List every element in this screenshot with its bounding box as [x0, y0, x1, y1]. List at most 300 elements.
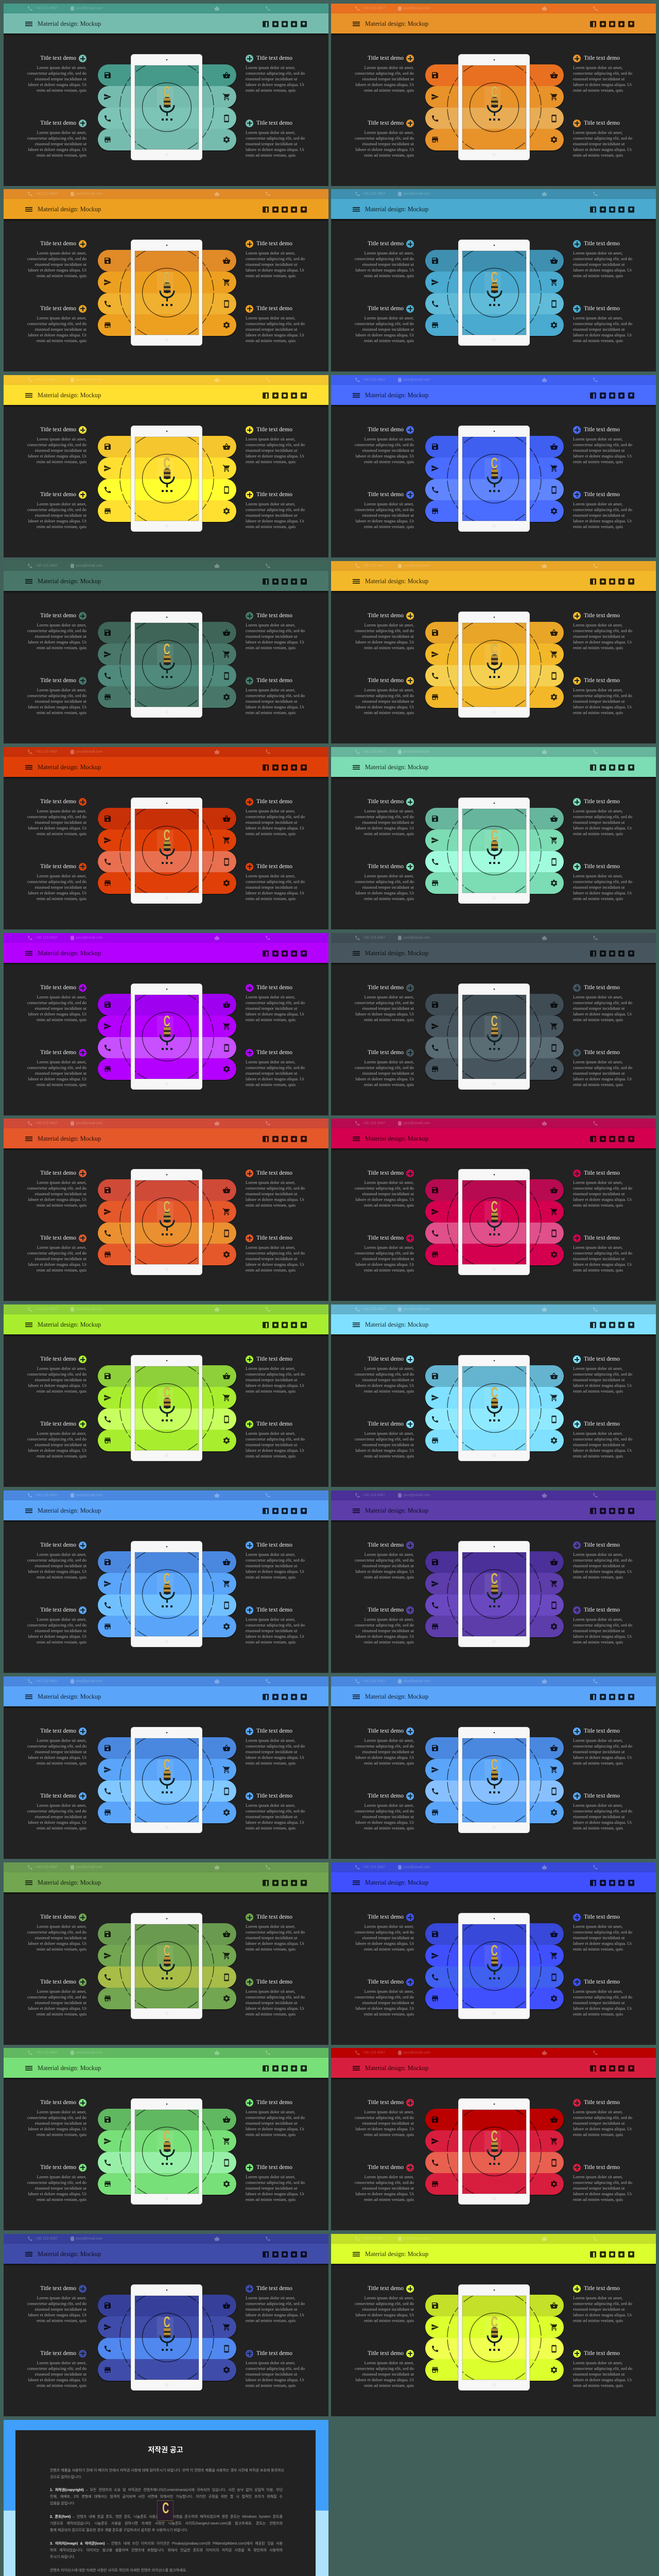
top bar: your@email.com	[76, 378, 103, 382]
top bar: +00 123 4567	[363, 1308, 385, 1311]
text block: Title text demo	[368, 120, 404, 126]
top bar: +00 123 4567	[36, 1680, 58, 1683]
text block	[350, 1541, 414, 1580]
text block	[246, 1355, 310, 1394]
text block: Lorem ipsum dolor sit amet, consectetur adipiscing elit, sed do eiusmod tempor incididunt ut labore et dolore magna aliqua. Ut enim ad minim veniam, quis	[573, 315, 632, 343]
top bar: +00 123 4567	[363, 378, 385, 382]
heading: copyright notice: 저작권 공고	[148, 2446, 183, 2454]
header: Material design: Mockup	[38, 1507, 101, 1514]
text block: Title text demo	[256, 799, 292, 805]
text block: Lorem ipsum dolor sit amet, consectetur adipiscing elit, sed do eiusmod tempor incididunt ut labore et dolore magna aliqua. Ut enim ad minim veniam, quis	[246, 994, 305, 1022]
top bar: your@email.com	[403, 1122, 430, 1125]
text block: Title text demo	[256, 863, 292, 870]
header: Material design: Mockup	[365, 2064, 428, 2072]
tablet mockup with pills	[98, 426, 237, 532]
header	[4, 1500, 328, 1520]
text block: Lorem ipsum dolor sit amet, consectetur adipiscing elit, sed do eiusmod tempor incididunt ut labore et dolore magna aliqua. Ut enim ad minim veniam, quis	[246, 1431, 305, 1459]
text block	[350, 1049, 414, 1088]
header: Material design: Mockup	[38, 392, 101, 399]
top bar: +00 123 4567	[36, 564, 58, 568]
top bar: your@email.com	[76, 2237, 103, 2241]
text block: Title text demo	[368, 492, 404, 498]
text block	[573, 1727, 637, 1766]
watermark	[157, 1387, 174, 1408]
text block: Title text demo	[368, 1421, 404, 1427]
top bar: your@email.com	[403, 2051, 430, 2055]
text block: Lorem ipsum dolor sit amet, consectetur adipiscing elit, sed do eiusmod tempor incididunt ut labore et dolore magna aliqua. Ut enim ad minim veniam, quis	[355, 315, 414, 343]
text block	[350, 984, 414, 1023]
watermark: C	[164, 1570, 170, 1587]
text block: Lorem ipsum dolor sit amet, consectetur adipiscing elit, sed do eiusmod tempor incididunt ut labore et dolore magna aliqua. Ut enim ad minim veniam, quis	[246, 1180, 305, 1208]
text block: Title text demo	[584, 799, 620, 805]
text block: Title text demo	[40, 985, 76, 991]
text block: Title text demo	[368, 1356, 404, 1362]
text block: Title text demo	[368, 2164, 404, 2171]
top bar: your@email.com	[76, 1494, 103, 1497]
text block	[350, 1606, 414, 1645]
watermark: C	[491, 2314, 498, 2331]
tablet mockup with pills	[98, 984, 237, 1090]
top bar: your@email.com	[76, 1866, 103, 1869]
text block	[350, 863, 414, 902]
text block	[246, 1792, 310, 1831]
watermark	[484, 1945, 501, 1966]
text block	[350, 1170, 414, 1208]
text block	[246, 1606, 310, 1645]
panel: card yellow	[4, 375, 328, 557]
header: Material design: Mockup	[365, 392, 428, 399]
text block: Title text demo	[256, 613, 292, 619]
text block: Title text demo	[584, 863, 620, 870]
header: Material design: Mockup	[365, 1507, 428, 1514]
text block: Lorem ipsum dolor sit amet, consectetur adipiscing elit, sed do eiusmod tempor incididunt ut labore et dolore magna aliqua. Ut enim ad minim veniam, quis	[246, 130, 305, 158]
header: Material design: Mockup	[365, 206, 428, 213]
text block: Lorem ipsum dolor sit amet, consectetur adipiscing elit, sed do eiusmod tempor incididunt ut labore et dolore magna aliqua. Ut enim ad minim veniam, quis	[573, 2295, 632, 2323]
text block: Lorem ipsum dolor sit amet, consectetur adipiscing elit, sed do eiusmod tempor incididunt ut labore et dolore magna aliqua. Ut enim ad minim veniam, quis	[27, 622, 86, 650]
panel: card navy	[4, 2234, 328, 2416]
text block: Lorem ipsum dolor sit amet, consectetur adipiscing elit, sed do eiusmod tempor incididunt ut labore et dolore magna aliqua. Ut enim ad minim veniam, quis	[246, 1617, 305, 1645]
text block: Lorem ipsum dolor sit amet, consectetur adipiscing elit, sed do eiusmod tempor incididunt ut labore et dolore magna aliqua. Ut enim ad minim veniam, quis	[27, 1617, 86, 1645]
text block	[573, 1792, 637, 1831]
text block	[246, 2285, 310, 2324]
text block: Title text demo	[40, 1979, 76, 1985]
text block	[22, 1541, 86, 1580]
watermark	[157, 1945, 174, 1966]
panel: copyright notice	[4, 2420, 328, 2576]
text block: Title text demo	[368, 1235, 404, 1241]
watermark	[484, 458, 501, 479]
text block: Title text demo	[40, 2285, 76, 2292]
text block	[22, 1049, 86, 1088]
top bar	[4, 747, 328, 757]
tablet mockup with pills	[425, 984, 564, 1090]
text block	[350, 1978, 414, 2017]
text block: Title text demo	[40, 120, 76, 126]
panel: card purple	[4, 933, 328, 1115]
text block	[350, 798, 414, 837]
text block: Title text demo	[584, 306, 620, 312]
text block: Title text demo	[584, 427, 620, 433]
text block	[573, 1049, 637, 1088]
text block: Lorem ipsum dolor sit amet, consectetur adipiscing elit, sed do eiusmod tempor incididunt ut labore et dolore magna aliqua. Ut enim ad minim veniam, quis	[27, 1180, 86, 1208]
text block: Title text demo	[40, 492, 76, 498]
watermark: C	[164, 2314, 170, 2331]
text block	[22, 863, 86, 902]
header: Material design: Mockup	[38, 2064, 101, 2072]
text block	[22, 1420, 86, 1459]
header: Material design: Mockup	[38, 20, 101, 27]
text block	[573, 863, 637, 902]
top bar: your@email.com	[403, 2237, 430, 2241]
text block: Lorem ipsum dolor sit amet, consectetur adipiscing elit, sed do eiusmod tempor incididunt ut labore et dolore magna aliqua. Ut enim ad minim veniam, quis	[355, 501, 414, 529]
panel: card royal blue	[331, 375, 656, 557]
top bar	[331, 1118, 656, 1128]
text block: Title text demo	[584, 2164, 620, 2171]
text block: Lorem ipsum dolor sit amet, consectetur adipiscing elit, sed do eiusmod tempor incididunt ut labore et dolore magna aliqua. Ut enim ad minim veniam, quis	[355, 873, 414, 901]
top bar	[331, 747, 656, 757]
text block: Lorem ipsum dolor sit amet, consectetur adipiscing elit, sed do eiusmod tempor incididunt ut labore et dolore magna aliqua. Ut enim ad minim veniam, quis	[27, 436, 86, 464]
header: Material design: Mockup	[365, 2250, 428, 2258]
tablet mockup with pills	[98, 54, 237, 160]
top bar: +00 123 4567	[36, 936, 58, 940]
text block: Title text demo	[256, 2099, 292, 2106]
top bar	[331, 2234, 656, 2244]
top bar: your@email.com	[76, 1308, 103, 1311]
top bar	[4, 4, 328, 13]
text block: Title text demo	[256, 2350, 292, 2357]
watermark: C	[164, 83, 170, 100]
tablet mockup with pills	[98, 240, 237, 346]
text block: Lorem ipsum dolor sit amet, consectetur adipiscing elit, sed do eiusmod tempor incididunt ut labore et dolore magna aliqua. Ut enim ad minim veniam, quis	[246, 1924, 305, 1952]
text block: Title text demo	[368, 1914, 404, 1920]
top bar: your@email.com	[403, 1494, 430, 1497]
text block: Title text demo	[40, 1356, 76, 1362]
text block: Lorem ipsum dolor sit amet, consectetur adipiscing elit, sed do eiusmod tempor incididunt ut labore et dolore magna aliqua. Ut enim ad minim veniam, quis	[246, 2295, 305, 2323]
text block	[573, 1978, 637, 2017]
text block	[22, 1170, 86, 1208]
text block	[350, 1234, 414, 1273]
top bar: your@email.com	[403, 1308, 430, 1311]
text block: Lorem ipsum dolor sit amet, consectetur adipiscing elit, sed do eiusmod tempor incididunt ut labore et dolore magna aliqua. Ut enim ad minim veniam, quis	[246, 622, 305, 650]
panel: card crimson	[331, 1118, 656, 1301]
panel: card cyan	[331, 1304, 656, 1487]
text: copyright: 1. 저작권(copyright) – 모든 컨텐츠의 소유 및 저작권은 컨텐츠매니아(Contentmania)사에 귀속되어 있습니다. 사전 승낙 없이 상업적 이용, 무단	[50, 2488, 283, 2492]
text block: Title text demo	[40, 1170, 76, 1176]
panel: card red-orange	[4, 747, 328, 929]
text: intro: 컨텐츠 제품을 사용하기 전에 이 페이지 안에서 저작권 사항에 대해 읽어주시기 바랍니다. 만약 이 컨텐츠 제품을 사용하는 경우 사전에 저작권 보호에 동의하신	[50, 2469, 284, 2472]
panel: card dark green	[4, 561, 328, 743]
text block: Title text demo	[256, 1914, 292, 1920]
text block: Title text demo	[256, 306, 292, 312]
text block: Title text demo	[368, 1049, 404, 1056]
text block	[246, 1913, 310, 1952]
text block: Title text demo	[40, 1728, 76, 1734]
text: copyright: 전재, 재배포, 2차 변형에 대해서는 엄격히 금지되며 사전 서면에 의해서만 가능합니다. 이러한 규정을 위반 할 시 법적인 조치가 취해질 수	[50, 2495, 283, 2499]
text block: Lorem ipsum dolor sit amet, consectetur adipiscing elit, sed do eiusmod tempor incididunt ut labore et dolore magna aliqua. Ut enim ad minim veniam, quis	[27, 1059, 86, 1087]
text block: Title text demo	[584, 613, 620, 619]
watermark	[157, 1016, 174, 1037]
watermark	[484, 1201, 501, 1222]
watermark: C	[162, 2500, 169, 2517]
text block: Title text demo	[256, 1421, 292, 1427]
top bar	[331, 4, 656, 13]
top bar	[4, 933, 328, 943]
text block	[246, 2164, 310, 2202]
text block	[246, 1420, 310, 1459]
text block	[573, 2350, 637, 2388]
text block	[350, 2350, 414, 2388]
text block: Title text demo	[584, 1356, 620, 1362]
top bar: your@email.com	[403, 750, 430, 754]
text block	[22, 2285, 86, 2324]
text block	[573, 984, 637, 1023]
text block: Lorem ipsum dolor sit amet, consectetur adipiscing elit, sed do eiusmod tempor incididunt ut labore et dolore magna aliqua. Ut enim ad minim veniam, quis	[27, 1989, 86, 2016]
text block: Lorem ipsum dolor sit amet, consectetur adipiscing elit, sed do eiusmod tempor incididunt ut labore et dolore magna aliqua. Ut enim ad minim veniam, quis	[246, 2109, 305, 2137]
text block: Lorem ipsum dolor sit amet, consectetur adipiscing elit, sed do eiusmod tempor incididunt ut labore et dolore magna aliqua. Ut enim ad minim veniam, quis	[27, 994, 86, 1022]
top bar: +00 123 4567	[36, 750, 58, 754]
text block: Title text demo	[584, 677, 620, 684]
header	[331, 1314, 656, 1334]
text block: Lorem ipsum dolor sit amet, consectetur adipiscing elit, sed do eiusmod tempor incididunt ut labore et dolore magna aliqua. Ut enim ad minim veniam, quis	[246, 1059, 305, 1087]
watermark	[484, 1016, 501, 1037]
tablet mockup with pills	[425, 612, 564, 718]
panel: card red	[331, 2048, 656, 2230]
text block: Title text demo	[368, 306, 404, 312]
text block	[22, 2164, 86, 2202]
text block: Lorem ipsum dolor sit amet, consectetur adipiscing elit, sed do eiusmod tempor incididunt ut labore et dolore magna aliqua. Ut enim ad minim veniam, quis	[355, 1059, 414, 1087]
text: fonts: 함께 제공되지 않으므로 필요한 경우 개별 폰트를 구입하셔서 설치한 후 사용하시기 바랍니다.	[50, 2529, 188, 2532]
text block: Lorem ipsum dolor sit amet, consectetur adipiscing elit, sed do eiusmod tempor incididunt ut labore et dolore magna aliqua. Ut enim ad minim veniam, quis	[355, 808, 414, 836]
tablet mockup with pills	[98, 1355, 237, 1462]
text block: Title text demo	[40, 427, 76, 433]
text block	[573, 1541, 637, 1580]
top bar: +00 123 4567	[36, 378, 58, 382]
text block	[573, 1234, 637, 1273]
text block: Lorem ipsum dolor sit amet, consectetur adipiscing elit, sed do eiusmod tempor incididunt ut labore et dolore magna aliqua. Ut enim ad minim veniam, quis	[573, 501, 632, 529]
text block: Lorem ipsum dolor sit amet, consectetur adipiscing elit, sed do eiusmod tempor incididunt ut labore et dolore magna aliqua. Ut enim ad minim veniam, quis	[573, 1803, 632, 1831]
text block	[573, 2285, 637, 2324]
top bar	[331, 561, 656, 571]
watermark	[157, 458, 174, 479]
text: images and icons: 3. 이미지(image) & 아이콘(icon) – 컨텐츠 내에 쓰인 이미지와 아이콘은 Pixabay(pixabay.com)와 Pikbest(pikbest.com)에서 제공된 것을 사용	[50, 2542, 283, 2546]
panel: card orange	[331, 4, 656, 186]
text block: Title text demo	[368, 1607, 404, 1613]
text block: Title text demo	[256, 1607, 292, 1613]
text block	[573, 1420, 637, 1459]
text: fonts: 기본으로 제작되었습니다. 나눔폰트 사용을 원하시면 자세한 사항은 나눔폰트 사이트(hangeul.naver.com)를 참고하세요. 폰트는 컨텐츠와	[50, 2522, 283, 2526]
tablet mockup with pills	[425, 426, 564, 532]
tablet mockup with pills	[425, 798, 564, 904]
text block	[573, 2164, 637, 2202]
text block: Title text demo	[584, 1979, 620, 1985]
top bar: your@email.com	[76, 564, 103, 568]
header	[331, 2244, 656, 2264]
text block: Title text demo	[584, 1235, 620, 1241]
text block: Title text demo	[256, 1793, 292, 1799]
watermark	[157, 272, 174, 293]
panel: card gold	[331, 561, 656, 743]
watermark: C	[164, 455, 170, 472]
text block: Lorem ipsum dolor sit amet, consectetur adipiscing elit, sed do eiusmod tempor incididunt ut labore et dolore magna aliqua. Ut enim ad minim veniam, quis	[246, 2360, 305, 2388]
panel: card teal	[4, 4, 328, 186]
text block: Lorem ipsum dolor sit amet, consectetur adipiscing elit, sed do eiusmod tempor incididunt ut labore et dolore magna aliqua. Ut enim ad minim veniam, quis	[573, 873, 632, 901]
watermark: C	[491, 455, 498, 472]
panel: card blue	[4, 1490, 328, 1673]
text block: Title text demo	[584, 2350, 620, 2357]
text block: Title text demo	[368, 427, 404, 433]
top bar	[4, 2048, 328, 2058]
header: Material design: Mockup	[38, 950, 101, 957]
text block: Title text demo	[584, 2285, 620, 2292]
text block: Lorem ipsum dolor sit amet, consectetur adipiscing elit, sed do eiusmod tempor incididunt ut labore et dolore magna aliqua. Ut enim ad minim veniam, quis	[573, 1552, 632, 1580]
text block: Title text demo	[40, 1542, 76, 1548]
text block: Title text demo	[584, 120, 620, 126]
header	[4, 199, 328, 219]
watermark	[484, 830, 501, 851]
text block: Lorem ipsum dolor sit amet, consectetur adipiscing elit, sed do eiusmod tempor incididunt ut labore et dolore magna aliqua. Ut enim ad minim veniam, quis	[573, 1617, 632, 1645]
top bar: your@email.com	[403, 378, 430, 382]
text block: Lorem ipsum dolor sit amet, consectetur adipiscing elit, sed do eiusmod tempor incididunt ut labore et dolore magna aliqua. Ut enim ad minim veniam, quis	[355, 1431, 414, 1459]
top bar	[4, 2234, 328, 2244]
text block: Lorem ipsum dolor sit amet, consectetur adipiscing elit, sed do eiusmod tempor incididunt ut labore et dolore magna aliqua. Ut enim ad minim veniam, quis	[27, 1366, 86, 1394]
top bar	[331, 189, 656, 199]
text block: Title text demo	[40, 306, 76, 312]
header: Material design: Mockup	[38, 206, 101, 213]
text block: Title text demo	[584, 55, 620, 61]
watermark	[157, 2317, 174, 2337]
watermark: C	[491, 1570, 498, 1587]
top bar: your@email.com	[76, 2051, 103, 2055]
text: images and icons	[50, 2540, 283, 2561]
header	[331, 1500, 656, 1520]
watermark	[484, 2131, 501, 2151]
text block: Lorem ipsum dolor sit amet, consectetur adipiscing elit, sed do eiusmod tempor incididunt ut labore et dolore magna aliqua. Ut enim ad minim veniam, quis	[355, 687, 414, 715]
top bar	[4, 1304, 328, 1314]
tablet mockup with pills	[425, 1169, 564, 1276]
text block: Title text demo	[584, 1049, 620, 1056]
text block: Title text demo	[368, 2350, 404, 2357]
watermark	[157, 1201, 174, 1222]
top bar: your@email.com	[76, 936, 103, 940]
top bar: +00 123 4567	[36, 1866, 58, 1869]
header: Material design: Mockup	[365, 1879, 428, 1886]
watermark: C	[491, 83, 498, 100]
text block	[22, 1727, 86, 1766]
tablet mockup with pills	[98, 612, 237, 718]
header: Material design: Mockup	[365, 20, 428, 27]
text block: Title text demo	[584, 1793, 620, 1799]
text block: Title text demo	[584, 1170, 620, 1176]
text block: Title text demo	[256, 1728, 292, 1734]
panel: card deep purple	[331, 1490, 656, 1673]
text block: Lorem ipsum dolor sit amet, consectetur adipiscing elit, sed do eiusmod tempor incididunt ut labore et dolore magna aliqua. Ut enim ad minim veniam, quis	[355, 1803, 414, 1831]
watermark	[157, 644, 174, 665]
text block: Lorem ipsum dolor sit amet, consectetur adipiscing elit, sed do eiusmod tempor incididunt ut labore et dolore magna aliqua. Ut enim ad minim veniam, quis	[27, 65, 86, 93]
panel: card amber	[4, 189, 328, 371]
text block: Title text demo	[368, 241, 404, 247]
text block: Title text demo	[40, 2164, 76, 2171]
text block	[246, 1049, 310, 1088]
watermark	[157, 830, 174, 851]
text block: Lorem ipsum dolor sit amet, consectetur adipiscing elit, sed do eiusmod tempor incididunt ut labore et dolore magna aliqua. Ut enim ad minim veniam, quis	[27, 250, 86, 278]
watermark: C	[491, 2128, 498, 2145]
header	[331, 13, 656, 33]
text block: Lorem ipsum dolor sit amet, consectetur adipiscing elit, sed do eiusmod tempor incididunt ut labore et dolore magna aliqua. Ut enim ad minim veniam, quis	[573, 622, 632, 650]
top bar: your@email.com	[76, 1122, 103, 1125]
watermark: C	[164, 1942, 170, 1959]
tablet mockup with pills	[98, 1541, 237, 1648]
header	[4, 2244, 328, 2264]
text block: Title text demo	[368, 2099, 404, 2106]
watermark: C	[491, 1756, 498, 1773]
header	[331, 1128, 656, 1148]
text block: Lorem ipsum dolor sit amet, consectetur adipiscing elit, sed do eiusmod tempor incididunt ut labore et dolore magna aliqua. Ut enim ad minim veniam, quis	[27, 130, 86, 158]
text block: Lorem ipsum dolor sit amet, consectetur adipiscing elit, sed do eiusmod tempor incididunt ut labore et dolore magna aliqua. Ut enim ad minim veniam, quis	[573, 250, 632, 278]
header: Material design: Mockup	[38, 1693, 101, 1700]
header: Material design: Mockup	[38, 578, 101, 585]
text block: Title text demo	[256, 2164, 292, 2171]
text block: Lorem ipsum dolor sit amet, consectetur adipiscing elit, sed do eiusmod tempor incididunt ut labore et dolore magna aliqua. Ut enim ad minim veniam, quis	[573, 994, 632, 1022]
text block	[350, 1420, 414, 1459]
top bar: your@email.com	[403, 7, 430, 10]
text block	[22, 798, 86, 837]
text block: Lorem ipsum dolor sit amet, consectetur adipiscing elit, sed do eiusmod tempor incididunt ut labore et dolore magna aliqua. Ut enim ad minim veniam, quis	[355, 1180, 414, 1208]
text block: Lorem ipsum dolor sit amet, consectetur adipiscing elit, sed do eiusmod tempor incididunt ut labore et dolore magna aliqua. Ut enim ad minim veniam, quis	[27, 2109, 86, 2137]
text block	[350, 2285, 414, 2324]
text block: Title text demo	[40, 799, 76, 805]
text: intro	[50, 2467, 283, 2481]
text block	[350, 2099, 414, 2138]
watermark: C	[491, 1384, 498, 1401]
text block: Lorem ipsum dolor sit amet, consectetur adipiscing elit, sed do eiusmod tempor incididunt ut labore et dolore magna aliqua. Ut enim ad minim veniam, quis	[573, 130, 632, 158]
text block: Lorem ipsum dolor sit amet, consectetur adipiscing elit, sed do eiusmod tempor incididunt ut labore et dolore magna aliqua. Ut enim ad minim veniam, quis	[355, 1245, 414, 1273]
watermark: C	[491, 269, 498, 286]
text block: Lorem ipsum dolor sit amet, consectetur adipiscing elit, sed do eiusmod tempor incididunt ut labore et dolore magna aliqua. Ut enim ad minim veniam, quis	[27, 687, 86, 715]
text block: Title text demo	[584, 2099, 620, 2106]
header	[331, 1686, 656, 1706]
top bar	[331, 1304, 656, 1314]
text block: Title text demo	[40, 863, 76, 870]
top bar	[4, 1862, 328, 1872]
text block: Title text demo	[368, 2285, 404, 2292]
text block: Title text demo	[256, 1356, 292, 1362]
watermark	[484, 644, 501, 665]
top bar: +00 123 4567	[36, 2051, 58, 2055]
text block: Title text demo	[584, 241, 620, 247]
text block: Lorem ipsum dolor sit amet, consectetur adipiscing elit, sed do eiusmod tempor incididunt ut labore et dolore magna aliqua. Ut enim ad minim veniam, quis	[355, 2295, 414, 2323]
text block	[22, 984, 86, 1023]
text block: Title text demo	[256, 1235, 292, 1241]
top bar: +00 123 4567	[36, 1308, 58, 1311]
text block: Lorem ipsum dolor sit amet, consectetur adipiscing elit, sed do eiusmod tempor incididunt ut labore et dolore magna aliqua. Ut enim ad minim veniam, quis	[355, 622, 414, 650]
text block: Lorem ipsum dolor sit amet, consectetur adipiscing elit, sed do eiusmod tempor incididunt ut labore et dolore magna aliqua. Ut enim ad minim veniam, quis	[355, 436, 414, 464]
copyright notice box	[15, 2430, 316, 2576]
text block: Lorem ipsum dolor sit amet, consectetur adipiscing elit, sed do eiusmod tempor incididunt ut labore et dolore magna aliqua. Ut enim ad minim veniam, quis	[246, 1245, 305, 1273]
top bar	[4, 561, 328, 571]
watermark: C	[164, 1384, 170, 1401]
top bar: your@email.com	[403, 564, 430, 568]
text block	[573, 1170, 637, 1208]
watermark: C	[164, 2128, 170, 2145]
header: Material design: Mockup	[365, 1693, 428, 1700]
text block	[573, 1606, 637, 1645]
top bar	[331, 375, 656, 385]
watermark: C	[491, 827, 498, 844]
text block: Title text demo	[368, 799, 404, 805]
text block: Lorem ipsum dolor sit amet, consectetur adipiscing elit, sed do eiusmod tempor incididunt ut labore et dolore magna aliqua. Ut enim ad minim veniam, quis	[573, 1059, 632, 1087]
text block	[22, 1606, 86, 1645]
tablet mockup with pills	[98, 2284, 237, 2391]
